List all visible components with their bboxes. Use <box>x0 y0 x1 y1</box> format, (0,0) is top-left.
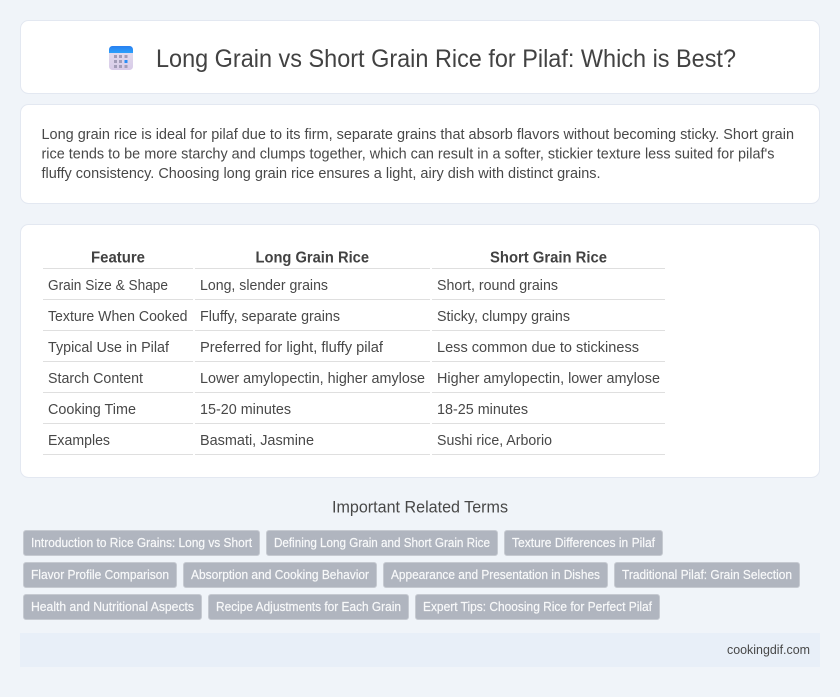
table rules <box>43 268 665 455</box>
tag: Introduction to Rice Grains: Long vs Short <box>31 536 253 550</box>
tag <box>24 562 176 588</box>
text block: introduction: fluffy consistency. Choosing long grain rice ensures a light, airy dish with distinct grains. <box>42 165 600 182</box>
table column: short grain rice: Less common due to stickiness <box>437 340 639 356</box>
panel: title card <box>20 20 820 94</box>
table column: long grain rice: Basmati, Jasmine <box>200 433 314 449</box>
heading: important related terms: Important Related Terms <box>332 498 508 516</box>
table column: short grain rice: Short, round grains <box>437 278 558 294</box>
table column: feature: Texture When Cooked <box>48 309 188 325</box>
table column: feature: Starch Content <box>48 371 143 387</box>
tag <box>416 594 660 620</box>
tag: Recipe Adjustments for Each Grain <box>216 600 401 614</box>
table column: long grain rice: Fluffy, separate grains <box>200 309 340 325</box>
table header: Feature <box>91 250 145 266</box>
table column: feature: Grain Size & Shape <box>48 278 168 294</box>
table column: feature: Typical Use in Pilaf <box>48 340 170 356</box>
table column: feature: Examples <box>48 433 110 449</box>
table column: short grain rice: Sushi rice, Arborio <box>437 433 552 449</box>
table column: feature: Cooking Time <box>48 402 136 418</box>
table column: long grain rice: Lower amylopectin, higher amylose <box>200 371 425 387</box>
text block: introduction <box>42 126 794 182</box>
tag <box>266 530 498 556</box>
table header: Short Grain Rice <box>490 250 607 266</box>
table column: short grain rice: 18-25 minutes <box>437 402 528 418</box>
text block: introduction: Long grain rice is ideal for pilaf due to its firm, separate grains that absorb flavors without becoming sticky. Short grain <box>42 126 794 143</box>
panel: introduction <box>20 104 820 204</box>
table header <box>91 250 607 266</box>
table column: feature <box>48 278 188 449</box>
tag <box>24 530 260 556</box>
tag: Health and Nutritional Aspects <box>31 600 194 614</box>
tag list: related terms <box>24 530 800 620</box>
table column: long grain rice <box>200 278 425 449</box>
table column: short grain rice <box>437 278 660 449</box>
table column: long grain rice: Long, slender grains <box>200 278 328 294</box>
tag: Expert Tips: Choosing Rice for Perfect Pilaf <box>423 600 653 614</box>
tag: Texture Differences in Pilaf <box>512 536 656 550</box>
table column: short grain rice: Sticky, clumpy grains <box>437 309 570 325</box>
tag <box>184 562 376 588</box>
table column: long grain rice: 15-20 minutes <box>200 402 291 418</box>
title: Long Grain vs Short Grain Rice for Pilaf: Which is Best? <box>156 45 736 73</box>
tag: Absorption and Cooking Behavior <box>191 568 369 582</box>
tag <box>614 562 800 588</box>
tag <box>384 562 608 588</box>
table column: long grain rice: Preferred for light, fluffy pilaf <box>200 340 384 356</box>
tag: Flavor Profile Comparison <box>31 568 169 582</box>
tag: Defining Long Grain and Short Grain Rice <box>274 536 490 550</box>
table header: Long Grain Rice <box>256 250 369 266</box>
tag <box>504 530 662 556</box>
text block: introduction: rice tends to be more starchy and clumps together, which can result in a softer, stickier texture less suited for pilaf's <box>42 146 774 162</box>
table column: short grain rice: Higher amylopectin, lower amylose <box>437 371 660 387</box>
tag <box>24 594 202 620</box>
icon: calendar <box>109 46 133 70</box>
panel: comparison table <box>20 224 820 478</box>
footer <box>20 633 820 667</box>
footer source text: cookingdif.com <box>727 642 810 657</box>
tag <box>208 594 408 620</box>
tag: Traditional Pilaf: Grain Selection <box>622 568 792 582</box>
tag: Appearance and Presentation in Dishes <box>391 568 600 582</box>
